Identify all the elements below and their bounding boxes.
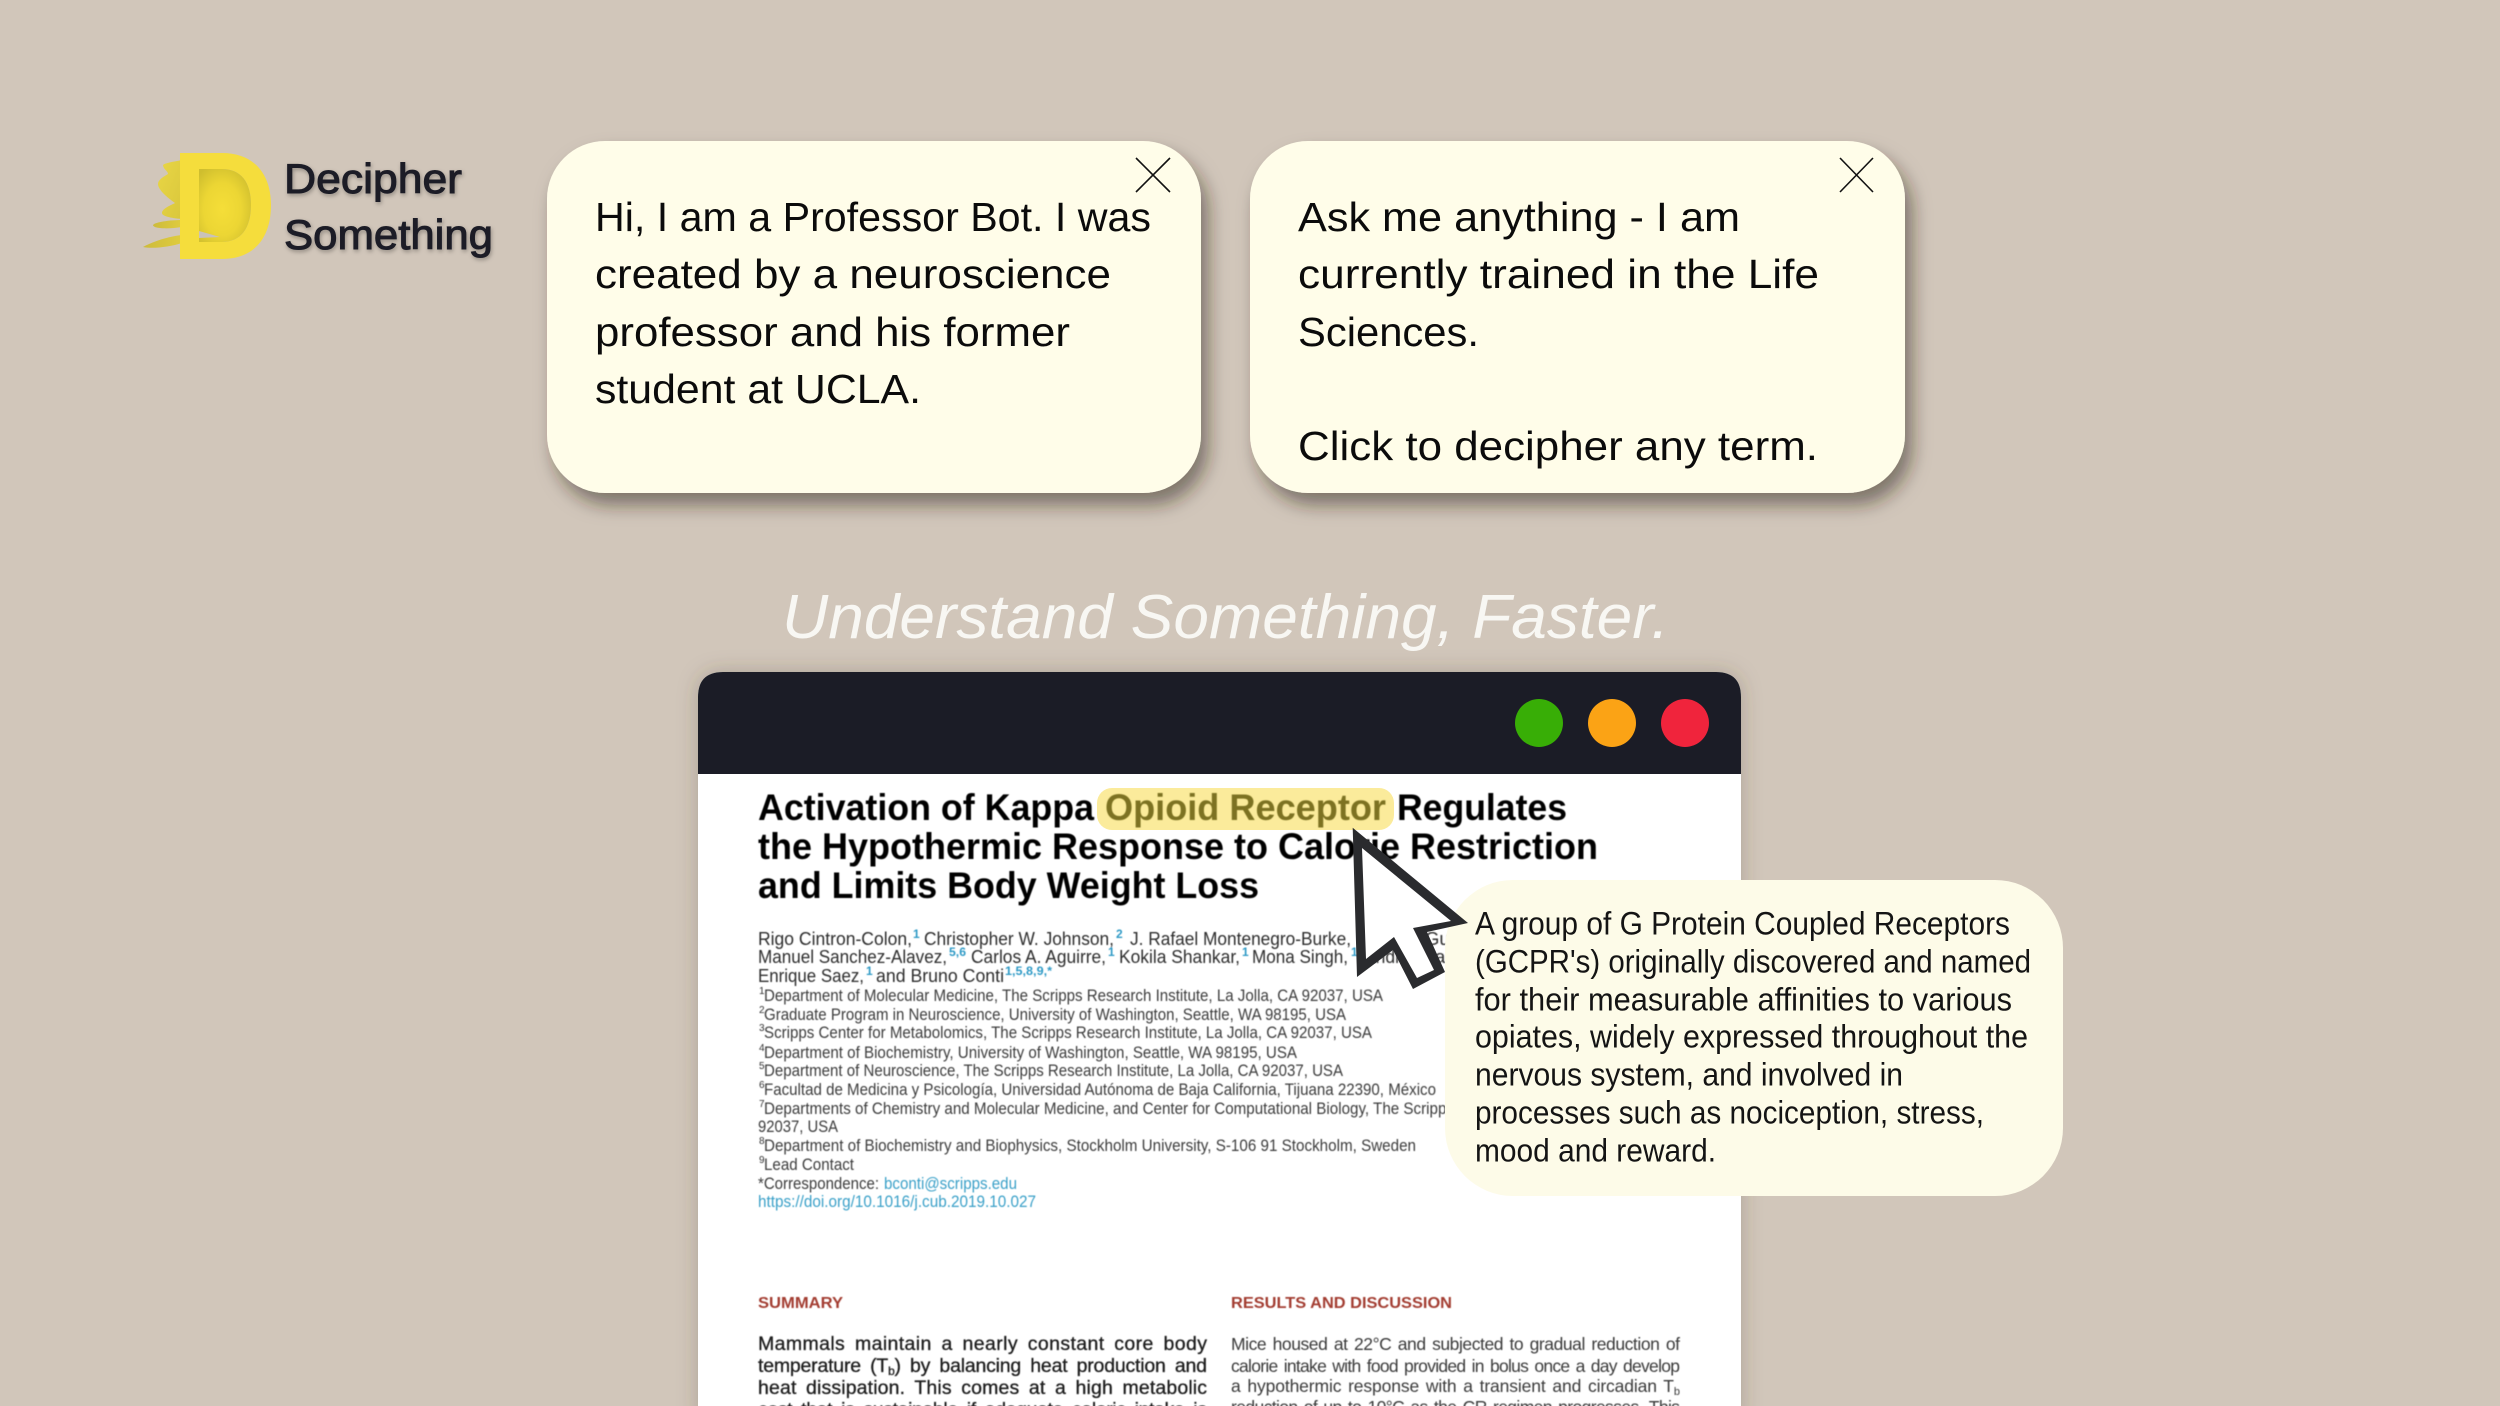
summary body text: temperature (T	[758, 1355, 888, 1377]
ask text: Sciences.	[1298, 309, 1479, 355]
paper affiliations: Department of Molecular Medicine, The Scripps Research Institute, La Jolla, CA 92037, USA	[764, 987, 1383, 1005]
section heading: summary: SUMMARY	[758, 1295, 844, 1312]
intro text: created by a neuroscience	[595, 251, 1111, 297]
paper authors: 5,6	[949, 945, 966, 959]
paper affiliations: 9	[759, 1155, 765, 1166]
panel: intro speech card	[547, 141, 1201, 493]
paper title: Regulates	[1397, 787, 1567, 828]
logo wordmark	[284, 155, 493, 258]
intro text: professor and his former	[595, 309, 1070, 355]
callout text: processes such as nociception, stress,	[1475, 1094, 1984, 1130]
paper affiliations: https://doi.org/10.1016/j.cub.2019.10.027	[758, 1193, 1036, 1211]
paper affiliations: 4	[759, 1043, 765, 1054]
intro text: student at UCLA.	[595, 366, 921, 412]
paper authors: J. Rafael Montenegro-Burke,	[1130, 928, 1351, 949]
paper affiliations: Facultad de Medicina y Psicología, Universidad Autónoma de Baja California, Tijuana 22390, México	[764, 1081, 1436, 1099]
paper authors: Manuel Sanchez-Alavez,	[758, 946, 947, 967]
callout text: A group of G Protein Coupled Receptors	[1475, 906, 2010, 942]
paper affiliations: 3	[759, 1023, 765, 1034]
results body text	[1231, 1334, 1680, 1406]
paper authors: 1	[1108, 945, 1115, 959]
callout text	[1475, 906, 2031, 1168]
logo wordmark: Decipher	[284, 155, 462, 202]
paper affiliations: *Correspondence:	[758, 1175, 879, 1193]
logo: Decipher Something	[143, 153, 493, 259]
paper title: the Hypothermic Response to Calorie Restriction	[758, 826, 1598, 867]
icon: close X	[1840, 158, 1873, 192]
paper authors: Kokila Shankar,	[1119, 946, 1240, 967]
summary body text: Mammals maintain a nearly constant core body	[758, 1333, 1207, 1355]
paper authors: 1	[913, 927, 920, 941]
icon: mouse cursor arrow	[1353, 828, 1468, 989]
paper authors: 1	[1242, 945, 1249, 959]
paper authors: Christopher W. Johnson,	[924, 928, 1114, 949]
paper authors: and Bruno Conti	[876, 965, 1004, 986]
paper title: and Limits Body Weight Loss	[758, 865, 1259, 906]
tagline: Understand Something, Faster.	[782, 583, 1669, 652]
paper authors: 1	[866, 964, 873, 978]
ask text: currently trained in the Life	[1298, 251, 1819, 297]
paper affiliations: 6	[759, 1080, 765, 1091]
paper authors: Andi	[1364, 946, 1399, 967]
section heading: results and discussion: RESULTS AND DISCUSSION	[1231, 1295, 1452, 1312]
paper affiliations: Graduate Program in Neuroscience, University of Washington, Seattle, WA 98195, USA	[764, 1006, 1346, 1024]
paper affiliations	[758, 986, 1454, 1211]
panel: ask me anything card	[1250, 141, 1905, 493]
paper authors: Rigo Cintron-Colon,	[758, 928, 912, 949]
paper authors: Enrique Saez,	[758, 965, 864, 986]
paper title: Opioid Receptor	[1105, 787, 1386, 828]
paper affiliations: 5	[759, 1061, 765, 1072]
summary body text: b	[888, 1364, 895, 1378]
paper affiliations: 92037, USA	[758, 1118, 838, 1136]
ask text: Click to decipher any term.	[1298, 423, 1818, 469]
callout text: opiates, widely expressed throughout the	[1475, 1018, 2028, 1054]
paper authors: Mona Singh,	[1252, 946, 1348, 967]
results body text: a hypothermic response with a transient and circadian T	[1231, 1376, 1674, 1396]
ask text	[1298, 194, 1819, 469]
paper authors: Carlos A. Aguirre,	[971, 946, 1106, 967]
window title bar	[698, 672, 1741, 774]
window buttons	[1515, 699, 1709, 747]
summary body text: heat dissipation. This comes at a high metabolic	[758, 1377, 1207, 1399]
results body text: calorie intake with food provided in bolus once a day develop	[1231, 1356, 1680, 1376]
results body text: Mice housed at 22°C and subjected to gradual reduction of	[1231, 1334, 1680, 1354]
paper title: Activation of Kappa	[758, 787, 1094, 828]
paper affiliations: 2	[759, 1005, 765, 1016]
paper authors	[758, 927, 1454, 986]
paper authors: a	[1435, 946, 1446, 967]
ask text: Ask me anything - I am	[1298, 194, 1740, 240]
paper affiliations: Department of Neuroscience, The Scripps Research Institute, La Jolla, CA 92037, USA	[764, 1062, 1343, 1080]
summary body text: ) by balancing heat production and	[895, 1355, 1207, 1377]
callout text: mood and reward.	[1475, 1132, 1716, 1168]
paper affiliations: bconti@scripps.edu	[884, 1175, 1017, 1193]
icon: yellow D with brush strokes	[143, 153, 271, 259]
paper affiliations: 7	[759, 1099, 765, 1110]
callout text: for their measurable affinities to various	[1475, 982, 2012, 1018]
paper authors: 2	[1116, 927, 1123, 941]
callout text: nervous system, and involved in	[1475, 1056, 1903, 1092]
callout text: (GCPR's) originally discovered and named	[1475, 944, 2031, 980]
paper affiliations: 1	[759, 986, 765, 997]
highlight on Opioid Receptor	[1097, 788, 1394, 830]
paper affiliations: Scripps Center for Metabolomics, The Scripps Research Institute, La Jolla, CA 92037, USA	[764, 1024, 1372, 1042]
paper affiliations: 8	[759, 1136, 765, 1147]
paper affiliations: Department of Biochemistry, University of Washington, Seattle, WA 98195, USA	[764, 1044, 1297, 1062]
icon: close X	[1136, 158, 1170, 192]
paper authors: Gui	[1425, 928, 1454, 949]
logo wordmark: Something	[284, 211, 493, 258]
panel: browser window	[698, 672, 1741, 1406]
paper affiliations: Department of Biochemistry and Biophysics, Stockholm University, S-106 91 Stockholm, Sweden	[764, 1137, 1416, 1155]
paper affiliations: Departments of Chemistry and Molecular Medicine, and Center for Computational Biology, The Scripps	[764, 1100, 1454, 1118]
intro text: Hi, I am a Professor Bot. I was	[595, 194, 1151, 240]
paper authors: 1,5,8,9,*	[1005, 964, 1052, 978]
paper title	[758, 787, 1598, 906]
callout: definition of opioid receptor	[1445, 880, 2063, 1196]
intro text	[595, 194, 1151, 412]
results body text: b	[1674, 1386, 1680, 1398]
paper affiliations: Lead Contact	[764, 1156, 854, 1174]
paper authors: 1	[1351, 945, 1358, 959]
summary body text	[758, 1333, 1207, 1406]
